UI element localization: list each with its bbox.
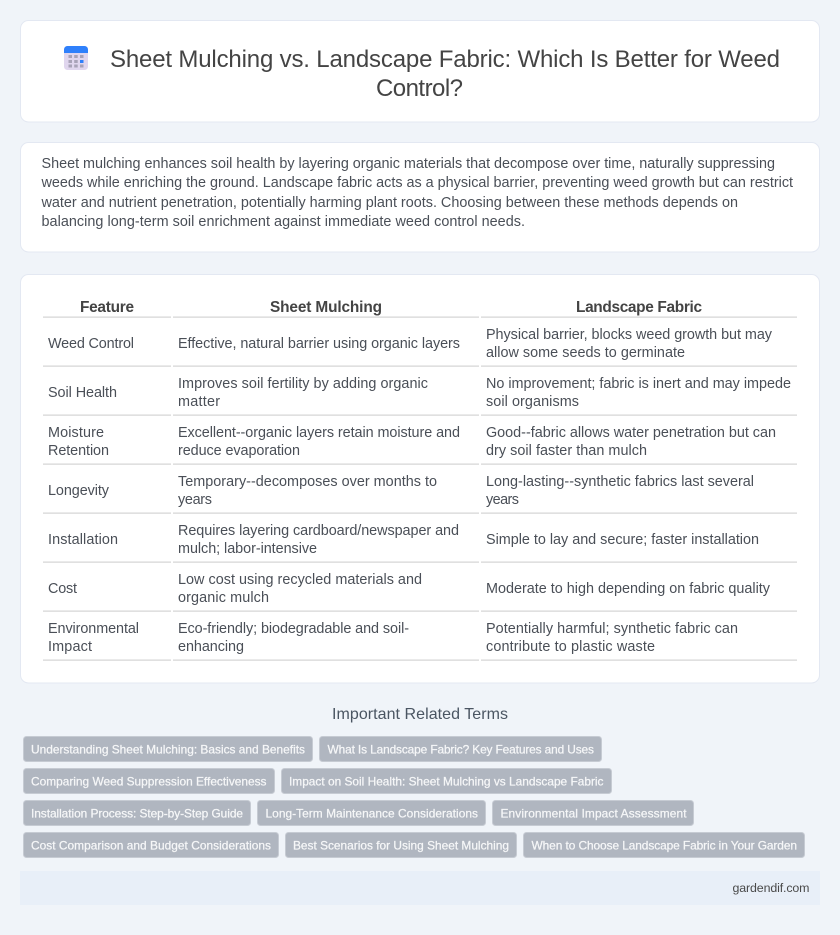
table row: installation: Installation	[48, 532, 118, 548]
tag	[24, 832, 278, 858]
table row: moisture retention: reduce evaporation	[178, 443, 300, 459]
table row: soil health: Improves soil fertility by adding organic	[178, 376, 428, 392]
intro text block	[40, 156, 793, 230]
table row: soil health: soil organisms	[486, 394, 579, 410]
table row: longevity: years	[178, 492, 212, 508]
table row: weed control: Effective, natural barrier using organic layers	[178, 336, 460, 352]
tag: Installation Process: Step-by-Step Guide	[31, 806, 243, 820]
table row: installation	[48, 523, 759, 557]
panel: comparison table	[20, 274, 820, 683]
table header row: Sheet Mulching	[270, 299, 382, 316]
table row: environmental impact	[48, 621, 738, 655]
tag: Environmental Impact Assessment	[500, 806, 687, 820]
table header row: Landscape Fabric	[576, 299, 702, 316]
title: Control?	[376, 75, 463, 102]
table row: longevity: Long-lasting--synthetic fabrics last several	[486, 474, 754, 490]
table row: longevity	[48, 474, 754, 508]
table row: cost: organic mulch	[178, 590, 269, 606]
tag	[24, 768, 274, 794]
tag: Impact on Soil Health: Sheet Mulching vs Landscape Fabric	[289, 774, 604, 788]
intro text block: Sheet mulching enhances soil health by layering organic materials that decompose over time, naturally suppressing	[42, 156, 775, 172]
table row: environmental impact: enhancing	[178, 639, 244, 655]
table row: soil health: No improvement; fabric is inert and may impede	[486, 376, 791, 392]
panel: header	[20, 20, 820, 122]
tag	[492, 800, 694, 826]
table row: installation: Simple to lay and secure; faster installation	[486, 532, 759, 548]
panel: related term tags	[24, 736, 804, 858]
table row: environmental impact: Impact	[48, 639, 92, 655]
tag	[320, 736, 602, 762]
intro text block: water and nutrient penetration, potentially harming plant roots. Choosing between these methods depends on	[40, 195, 738, 211]
icon: calendar	[64, 46, 88, 70]
tag: What Is Landscape Fabric? Key Features and Uses	[328, 742, 594, 756]
table row: cost: Low cost using recycled materials and	[178, 572, 422, 588]
tag: Comparing Weed Suppression Effectiveness	[31, 774, 267, 788]
table row: environmental impact: Potentially harmful; synthetic fabric can	[486, 621, 738, 637]
tag	[24, 736, 312, 762]
table row: weed control: Weed Control	[48, 336, 134, 352]
heading: important related terms: Important Related Terms	[332, 706, 508, 723]
table row: weed control	[48, 327, 773, 361]
table row: cost: Cost	[48, 581, 77, 597]
tag: Understanding Sheet Mulching: Basics and Benefits	[31, 742, 305, 756]
intro text block: weeds while enriching the ground. Landscape fabric acts as a physical barrier, preventing weed growth but can restrict	[40, 175, 793, 191]
tag: Long-Term Maintenance Considerations	[266, 806, 478, 820]
table header row	[80, 299, 702, 316]
tag: Cost Comparison and Budget Considerations	[31, 838, 271, 852]
intro text block: balancing long-term soil enrichment against immediate weed control needs.	[42, 214, 525, 230]
table row: soil health: matter	[178, 394, 220, 410]
title: Sheet Mulching vs. Landscape Fabric: Which Is Better for Weed	[110, 46, 780, 73]
tag: Best Scenarios for Using Sheet Mulching	[293, 838, 509, 852]
table row: moisture retention: Excellent--organic layers retain moisture and	[178, 425, 460, 441]
table row: weed control: Physical barrier, blocks weed growth but may	[486, 327, 773, 343]
table row: moisture retention: Retention	[48, 443, 109, 459]
table row: moisture retention: Good--fabric allows water penetration but can	[486, 425, 776, 441]
table row: soil health	[48, 376, 791, 410]
footer: gardendif.com	[732, 881, 810, 895]
table row: environmental impact: contribute to plastic waste	[486, 639, 655, 655]
table row: moisture retention	[48, 425, 776, 459]
tag	[524, 832, 804, 858]
table row: longevity: Longevity	[48, 483, 110, 499]
title	[110, 46, 780, 102]
table row: cost: Moderate to high depending on fabric quality	[486, 581, 771, 597]
tag	[282, 768, 612, 794]
tag	[258, 800, 486, 826]
table row: cost	[48, 572, 771, 606]
table row: longevity: Temporary--decomposes over months to	[178, 474, 437, 490]
table row: environmental impact: Eco-friendly; biodegradable and soil-	[178, 621, 409, 637]
tag: When to Choose Landscape Fabric in Your Garden	[532, 838, 797, 852]
table row: moisture retention: Moisture	[48, 425, 104, 441]
table row: installation: mulch; labor-intensive	[178, 541, 317, 557]
table row: weed control: allow some seeds to germinate	[486, 345, 685, 361]
footer	[20, 871, 820, 905]
panel: introduction	[20, 142, 820, 252]
table row: environmental impact: Environmental	[48, 621, 139, 637]
table row: soil health: Soil Health	[48, 385, 117, 401]
tag	[24, 800, 250, 826]
table row: longevity: years	[486, 492, 519, 508]
table row: moisture retention: dry soil faster than mulch	[486, 443, 647, 459]
table header row: Feature	[80, 299, 134, 316]
tag	[286, 832, 516, 858]
table row: installation: Requires layering cardboard/newspaper and	[178, 523, 459, 539]
